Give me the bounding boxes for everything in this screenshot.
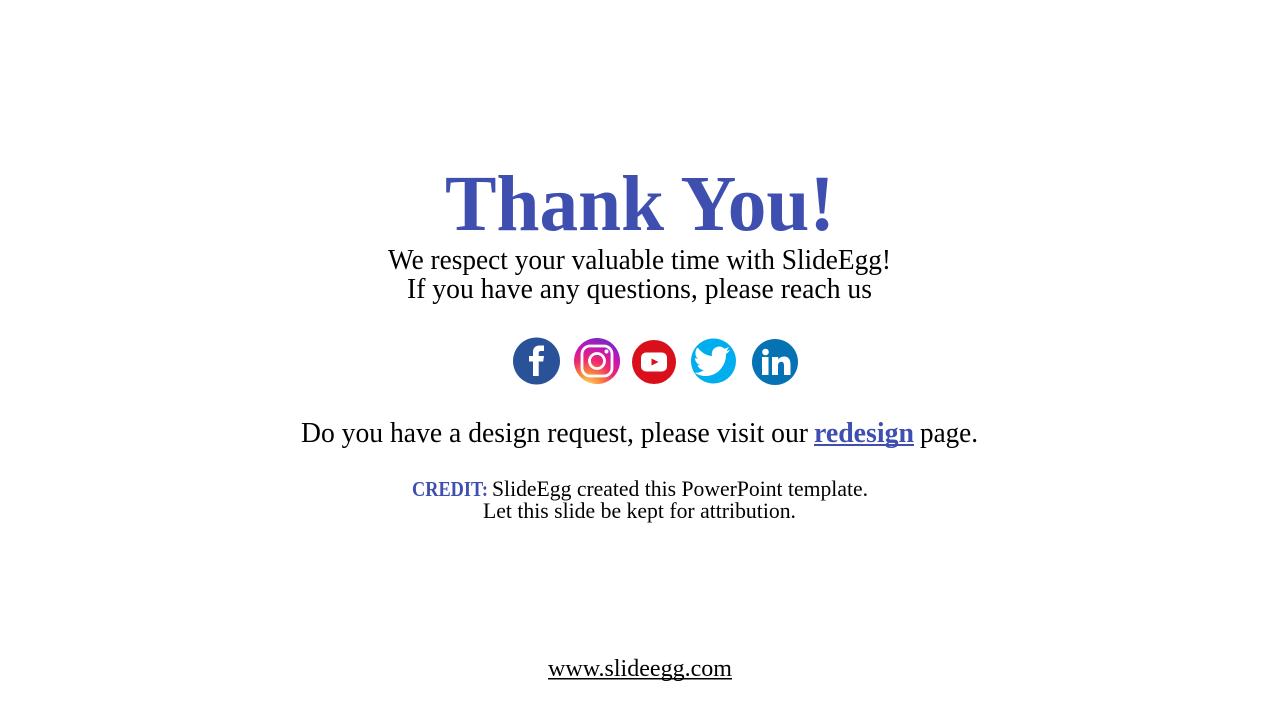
redesign link: redesign (814, 418, 914, 449)
subtitle message: If you have any questions, please reach us (407, 274, 872, 305)
credit text (412, 476, 868, 523)
subtitle message: We respect your valuable time with SlideEgg! (388, 245, 891, 276)
design request line: page. (920, 418, 978, 449)
title: Thank You! (445, 161, 835, 248)
subtitle message (388, 245, 891, 305)
icon: facebook (513, 338, 560, 384)
icon: youtube (632, 340, 676, 384)
credit text: Let this slide be kept for attribution. (483, 498, 796, 523)
icon: instagram (574, 338, 620, 384)
credit text: SlideEgg created this PowerPoint template. (492, 476, 868, 501)
icon: linkedin (752, 339, 798, 385)
design request line: Do you have a design request, please visit our (301, 418, 809, 449)
icon: twitter (691, 338, 736, 384)
website link: www.slideegg.com (548, 656, 732, 682)
social icons row (513, 338, 798, 385)
credit text: CREDIT: (412, 477, 488, 501)
